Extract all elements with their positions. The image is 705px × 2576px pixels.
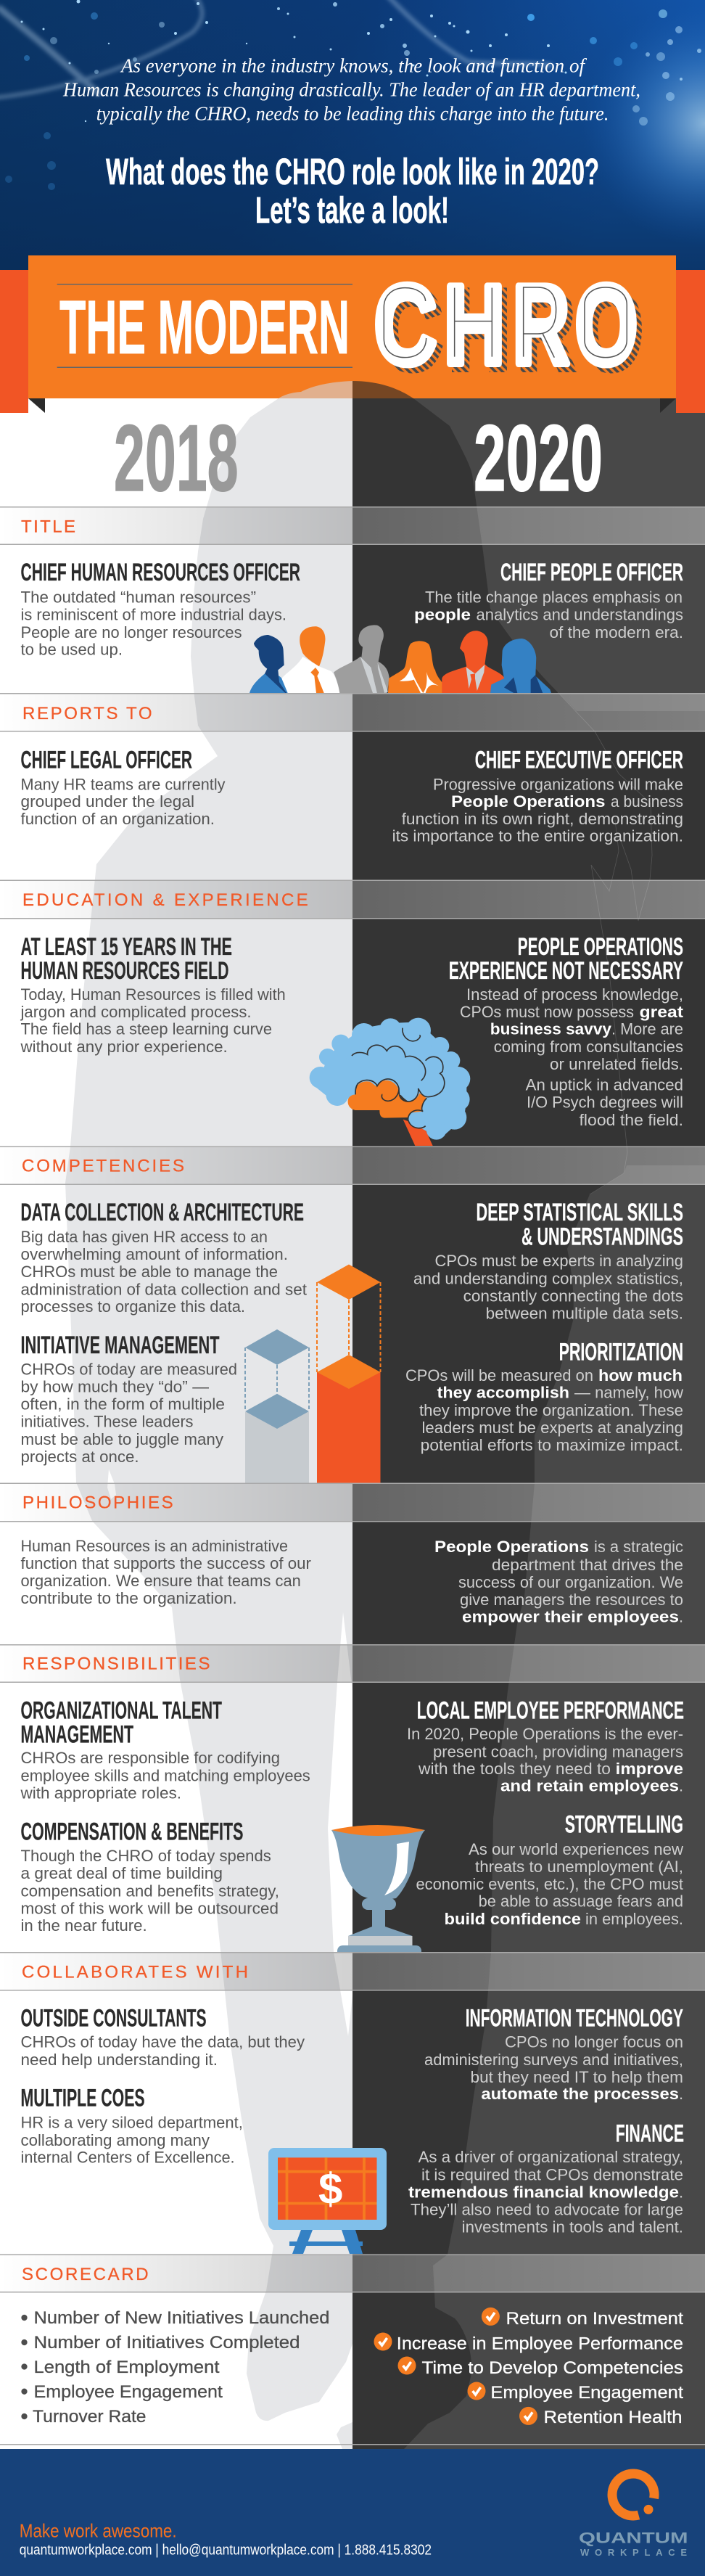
intro paragraph: typically the CHRO, needs to be leading this charge into the future. — [96, 102, 609, 124]
text: local employee performance: . — [679, 1777, 683, 1795]
list: 2018 scorecard: Employee Engagement — [33, 2382, 223, 2402]
text: multiple coes: internal Centers of Excellence. — [20, 2149, 235, 2167]
text: outside consultants — [20, 2033, 305, 2069]
section bar: title — [0, 506, 705, 545]
section bar: education and experience: EDUCATION & EXPERIENCE — [22, 890, 308, 910]
text: storytelling: in employees. — [585, 1910, 683, 1928]
text: storytelling: build confidence — [444, 1910, 581, 1928]
section bar: philosophies — [0, 1483, 705, 1522]
text: finance: . — [679, 2183, 683, 2202]
text: deep statistical skills: constantly connecting the dots — [463, 1287, 683, 1305]
heading: what does the CHRO role look like — [106, 151, 599, 231]
text: 2018 philosophy: organization. We ensure that teams can — [20, 1572, 301, 1590]
section bar: scorecard: SCORECARD — [22, 2265, 149, 2284]
text: 2018 reports to: Many HR teams are currently — [20, 775, 225, 793]
text: compensation and benefits: compensation and benefits strategy, — [20, 1882, 279, 1900]
section bar: philosophies: PHILOSOPHIES — [22, 1493, 173, 1513]
section bar: collaborates with: COLLABORATES WITH — [22, 1962, 248, 1982]
text: 2020 title — [414, 588, 683, 641]
icon: trophy — [331, 1825, 425, 1952]
text: prioritization: they accomplish — [437, 1384, 569, 1402]
text: finance: tremendous financial knowledge — [408, 2183, 679, 2202]
banner ribbon ends — [0, 270, 705, 413]
list: 2018 scorecard: Number of Initiatives Completed — [33, 2333, 300, 2353]
text: 2018 philosophy — [20, 1537, 311, 1607]
text: 2018 title: People are no longer resources — [20, 623, 242, 641]
title word: CHRO: O — [575, 262, 638, 387]
logo: quantum workplace: QUANTUM — [579, 2530, 688, 2547]
text: organizational talent management: with appropriate roles. — [20, 1784, 181, 1802]
text: data collection: CHROs must be able to manage the — [20, 1263, 278, 1281]
title word: CHRO: C — [379, 267, 442, 393]
text: 2020 reports to: Progressive organizations will make — [433, 775, 683, 793]
text: 2018 education: Today, Human Resources is filled with — [20, 985, 286, 1004]
list: 2018 scorecard — [22, 2308, 329, 2427]
section bar: title: TITLE — [21, 517, 75, 536]
icon: woman in orange — [388, 641, 444, 693]
text: 2018 education: without any prior experience. — [20, 1038, 228, 1056]
text: 2020 education: or unrelated fields. — [550, 1055, 683, 1073]
icons: check marks — [374, 2308, 537, 2425]
footer — [0, 2449, 705, 2576]
text: storytelling: As our world experiences new — [469, 1840, 683, 1858]
text: compensation and benefits: Though the CHRO of today spends — [20, 1847, 271, 1865]
section bar: collaborates with — [0, 1952, 705, 1991]
text: 2020 philosophy: . — [679, 1608, 683, 1626]
heading: organizational talent management: MANAGEMENT — [20, 1720, 133, 1748]
list: 2020 scorecard: Retention Health — [544, 2408, 682, 2427]
text: initiative management: CHROs of today are measured — [20, 1360, 237, 1379]
text: finance: They’ll also need to advocate for large — [411, 2201, 683, 2219]
text: 2020 education: . More are — [611, 1020, 683, 1038]
text: 2020 title: of the modern era. — [550, 623, 683, 641]
text: information technology: . — [679, 2085, 683, 2103]
silhouette: 2018 side — [65, 381, 352, 2449]
section bar: competencies: COMPETENCIES — [22, 1156, 184, 1176]
text: 2020 education: An uptick in advanced — [526, 1075, 683, 1094]
heading: organizational talent management — [20, 1697, 222, 1748]
text: information technology: CPOs no longer focus on — [505, 2033, 683, 2051]
text: 2020 title: The title change places emphasis on — [425, 588, 683, 607]
text: 2020 education: CPOs must now possess — [460, 1003, 634, 1021]
text: data collection — [20, 1228, 307, 1316]
text: 2020 education: great — [640, 1003, 684, 1021]
text: local employee performance: In 2020, People Operations is the ever- — [407, 1725, 683, 1743]
text: deep statistical skills: CPOs must be experts in analyzing — [435, 1252, 683, 1270]
text: storytelling: economic events, etc.), the CPO must — [416, 1875, 683, 1893]
year: 2018: 2018 — [114, 405, 239, 511]
text: multiple coes — [20, 2113, 243, 2167]
title word: CHRO: R — [518, 267, 574, 393]
panel: title — [0, 506, 705, 693]
text: storytelling: threats to unemployment (AI, — [475, 1858, 683, 1876]
text: 2020 reports to — [392, 775, 683, 845]
panel: education and experience — [0, 879, 705, 1146]
text: 2020 reports to: its importance to the entire organization. — [392, 827, 683, 845]
text: information technology: administering surveys and initiatives, — [424, 2051, 683, 2069]
text: deep statistical skills — [413, 1252, 683, 1322]
icon: man in gray suit — [334, 625, 389, 693]
text: 2020 title: people — [414, 606, 471, 624]
text: 2020 philosophy: People Operations — [434, 1538, 589, 1556]
text: 2018 philosophy: function that supports the success of our — [20, 1554, 311, 1572]
heading: multiple coes: MULTIPLE COES — [20, 2085, 145, 2112]
text: initiative management: by how much they “do” — — [20, 1377, 209, 1395]
top background: starry blue sky — [0, 0, 705, 276]
text: multiple coes: HR is a very siloed department, — [20, 2113, 243, 2132]
text: information technology: automate the processes — [481, 2085, 679, 2103]
heading: chief legal officer: CHIEF LEGAL OFFICER — [20, 747, 192, 774]
text: 2018 reports to — [20, 775, 225, 828]
text: 2018 education — [20, 985, 286, 1056]
text: prioritization: CPOs will be measured on — [405, 1366, 593, 1385]
text: compensation and benefits — [20, 1847, 279, 1935]
text: 2018 education: jargon and complicated process. — [20, 1003, 252, 1021]
heading: initiative management: INITIATIVE MANAGEMENT — [20, 1332, 220, 1359]
heading: organizational talent management: ORGANIZATIONAL TALENT — [20, 1697, 222, 1724]
chart: stacked bars — [245, 1264, 380, 1483]
panel: philosophies — [0, 1483, 705, 1626]
intro paragraph: Human Resources is changing drastically. The leader of an HR department, — [62, 78, 640, 100]
title word: CHRO: H — [444, 262, 505, 387]
text: initiative management: initiatives. These leaders — [20, 1413, 193, 1431]
text: 2018 reports to: function of an organization. — [20, 810, 215, 828]
list: 2018 scorecard: Turnover Rate — [33, 2407, 147, 2427]
list: 2020 scorecard: Time to Develop Competencies — [422, 2358, 683, 2378]
text: organizational talent management: CHROs are responsible for codifying — [20, 1749, 280, 1767]
icon: man in white shirt — [281, 626, 339, 693]
text: 2018 philosophy: contribute to the organization. — [20, 1589, 237, 1607]
text: 2020 education — [460, 985, 684, 1129]
text: compensation and benefits: most of this work will be outsourced — [20, 1899, 279, 1917]
text: 2020 education: Instead of process knowledge, — [466, 985, 683, 1004]
text: multiple coes: collaborating among many — [20, 2131, 210, 2149]
title word: CHRO: C — [374, 262, 437, 387]
silhouette: 2020 side — [352, 381, 705, 2449]
text: deep statistical skills: and understanding complex statistics, — [413, 1270, 683, 1288]
text: data collection: overwhelming amount of information. — [20, 1245, 288, 1263]
heading: at least 15 years: HUMAN RESOURCES FIELD — [20, 957, 229, 985]
text: local employee performance — [407, 1725, 683, 1795]
year: 2020: 2020 — [474, 405, 603, 511]
heading: chief human resources officer: CHIEF HUMAN RESOURCES OFFICER — [20, 559, 300, 586]
text: 2020 reports to: People Operations — [451, 792, 605, 811]
text: data collection: administration of data collection and set — [20, 1280, 307, 1298]
text: 2020 philosophy — [434, 1538, 683, 1626]
text: outside consultants: need help understanding it. — [20, 2051, 218, 2069]
text: finance: As a driver of organizational strategy, — [419, 2148, 683, 2166]
text: prioritization: — namely, how — [574, 1384, 683, 1402]
text: prioritization — [405, 1366, 683, 1454]
panel: scorecard — [0, 2254, 705, 2445]
text: information technology: but they need IT to help them — [470, 2068, 683, 2086]
text: compensation and benefits: a great deal of time building — [20, 1864, 223, 1882]
section bar: education and experience — [0, 879, 705, 919]
text: local employee performance: improve — [616, 1760, 683, 1778]
text: 2018 title: is reminiscent of more industrial days. — [20, 606, 286, 624]
icon: group of people — [250, 625, 551, 693]
text: finance: investments in tools and talent. — [462, 2218, 683, 2236]
list: 2018 scorecard: Length of Employment — [33, 2358, 220, 2377]
logo: quantum workplace: WORKPLACE — [580, 2547, 687, 2558]
icon: man in red suit — [442, 631, 504, 693]
title word: CHRO: O — [580, 267, 643, 393]
list: 2020 scorecard: Employee Engagement — [490, 2383, 683, 2403]
text: storytelling: be able to assuage fears and — [479, 1892, 683, 1911]
icon: woman in blue — [490, 639, 551, 693]
section bar: reports to — [0, 693, 705, 731]
text: 2018 education: The field has a steep learning curve — [20, 1020, 272, 1038]
section bar: scorecard — [0, 2254, 705, 2293]
text: prioritization: potential efforts to maximize impact. — [421, 1436, 683, 1454]
text: 2020 reports to: a business — [611, 792, 683, 811]
text: local employee performance: present coach, providing managers — [433, 1742, 683, 1760]
text: 2020 education: I/O Psych degrees will — [527, 1094, 683, 1112]
title word: CHRO: H — [449, 267, 510, 393]
heading: data collection and architecture: DATA COLLECTION & ARCHITECTURE — [20, 1199, 304, 1226]
list: 2020 scorecard: Return on Investment — [506, 2309, 683, 2329]
text: data collection: processes to organize this data. — [20, 1297, 245, 1316]
title word: CHRO — [374, 262, 643, 393]
text: deep statistical skills: between multiple data sets. — [486, 1304, 683, 1322]
text: prioritization: they improve the organization. These — [419, 1401, 683, 1419]
text: 2020 philosophy: success of our organization. We — [458, 1573, 683, 1591]
title word: CHRO: R — [513, 262, 569, 387]
heading: at least 15 years — [20, 933, 232, 985]
text: storytelling — [416, 1840, 683, 1928]
heading: compensation and benefits: COMPENSATION & BENEFITS — [20, 1818, 243, 1845]
text: 2020 philosophy: give managers the resources to — [460, 1591, 683, 1609]
panel: collaborates with — [0, 1952, 705, 2254]
text: 2020 philosophy: empower their employees — [462, 1608, 679, 1626]
bar: gray — [245, 1329, 309, 1483]
text: prioritization: leaders must be experts at analyzing — [422, 1419, 683, 1437]
text: organizational talent management — [20, 1749, 310, 1802]
text: information technology — [424, 2033, 683, 2103]
list: 2020 scorecard — [374, 2308, 683, 2427]
icon: easel with dollar chart: $ — [318, 2165, 342, 2213]
intro paragraph: As everyone in the industry knows, the look and function of — [120, 54, 587, 76]
text: 2018 title: to be used up. — [20, 640, 123, 658]
text: initiative management: projects at once. — [20, 1448, 139, 1466]
icon: easel with dollar chart — [268, 2148, 387, 2254]
icon: brain — [310, 1018, 470, 1146]
bar: orange — [317, 1264, 380, 1483]
heading: outside consultants: OUTSIDE CONSULTANTS — [20, 2004, 207, 2032]
text: 2020 education: flood the field. — [579, 1111, 683, 1129]
text: 2020 philosophy: department that drives the — [492, 1556, 683, 1574]
title words: the modern: THE MODERN — [59, 285, 350, 370]
section bar: responsibilities — [0, 1644, 705, 1683]
body background: white and dark halves — [0, 398, 705, 2449]
intro paragraph — [62, 54, 640, 124]
list: 2018 scorecard: Number of New Initiatives Launched — [33, 2308, 329, 2328]
text: outside consultants: CHROs of today have the data, but they — [20, 2033, 305, 2051]
text: initiative management: often, in the form of multiple — [20, 1395, 225, 1414]
text: finance: it is required that CPOs demonstrate — [421, 2165, 683, 2183]
text: 2018 title: The outdated “human resources” — [20, 588, 256, 607]
text: 2020 philosophy: is a strategic — [594, 1538, 683, 1556]
logo: quantum workplace — [579, 2474, 688, 2558]
text: 2020 education: business savvy — [490, 1020, 612, 1038]
heading: at least 15 years: AT LEAST 15 YEARS IN THE — [20, 933, 232, 961]
tagline: Make work awesome. — [20, 2519, 177, 2541]
panel: reports to — [0, 693, 705, 845]
text: 2020 reports to: function in its own right, demonstrating — [402, 810, 683, 828]
text: 2020 education: coming from consultancies — [494, 1038, 683, 1056]
heading: what does the CHRO role look like: Let’s take a look! — [255, 189, 449, 231]
panel: responsibilities — [0, 1644, 705, 1952]
heading: people operations experience not necessary — [449, 933, 683, 985]
text: data collection: Big data has given HR access to an — [20, 1228, 268, 1246]
text: initiative management: must be able to juggle many — [20, 1430, 223, 1448]
banner: the modern CHRO — [28, 255, 676, 398]
text: 2018 philosophy: Human Resources is an administrative — [20, 1537, 288, 1555]
text: 2018 reports to: grouped under the legal — [20, 792, 194, 811]
list: 2020 scorecard: Increase in Employee Performance — [397, 2334, 683, 2353]
text: local employee performance: with the tools they need to — [418, 1760, 611, 1778]
contact details: quantumworkplace.com | hello@quantumworkplace.com | 1.888.415.8302 — [20, 2543, 432, 2559]
text: 2018 title — [20, 588, 286, 658]
section bar: reports to: REPORTS TO — [22, 704, 152, 723]
panel: competencies — [0, 1147, 705, 1483]
section bar: competencies — [0, 1147, 705, 1185]
text: prioritization: how much — [598, 1366, 683, 1385]
text: organizational talent management: employee skills and matching employees — [20, 1766, 310, 1784]
text: finance — [408, 2148, 683, 2236]
text: compensation and benefits: in the near future. — [20, 1916, 147, 1935]
heading: deep statistical skills — [476, 1199, 683, 1250]
section bar: responsibilities: RESPONSIBILITIES — [22, 1654, 210, 1673]
text: local employee performance: and retain employees — [500, 1777, 679, 1795]
text: 2020 title: analytics and understandings — [476, 606, 683, 624]
icon: woman in blue jacket — [250, 635, 289, 693]
text: initiative management — [20, 1360, 237, 1466]
